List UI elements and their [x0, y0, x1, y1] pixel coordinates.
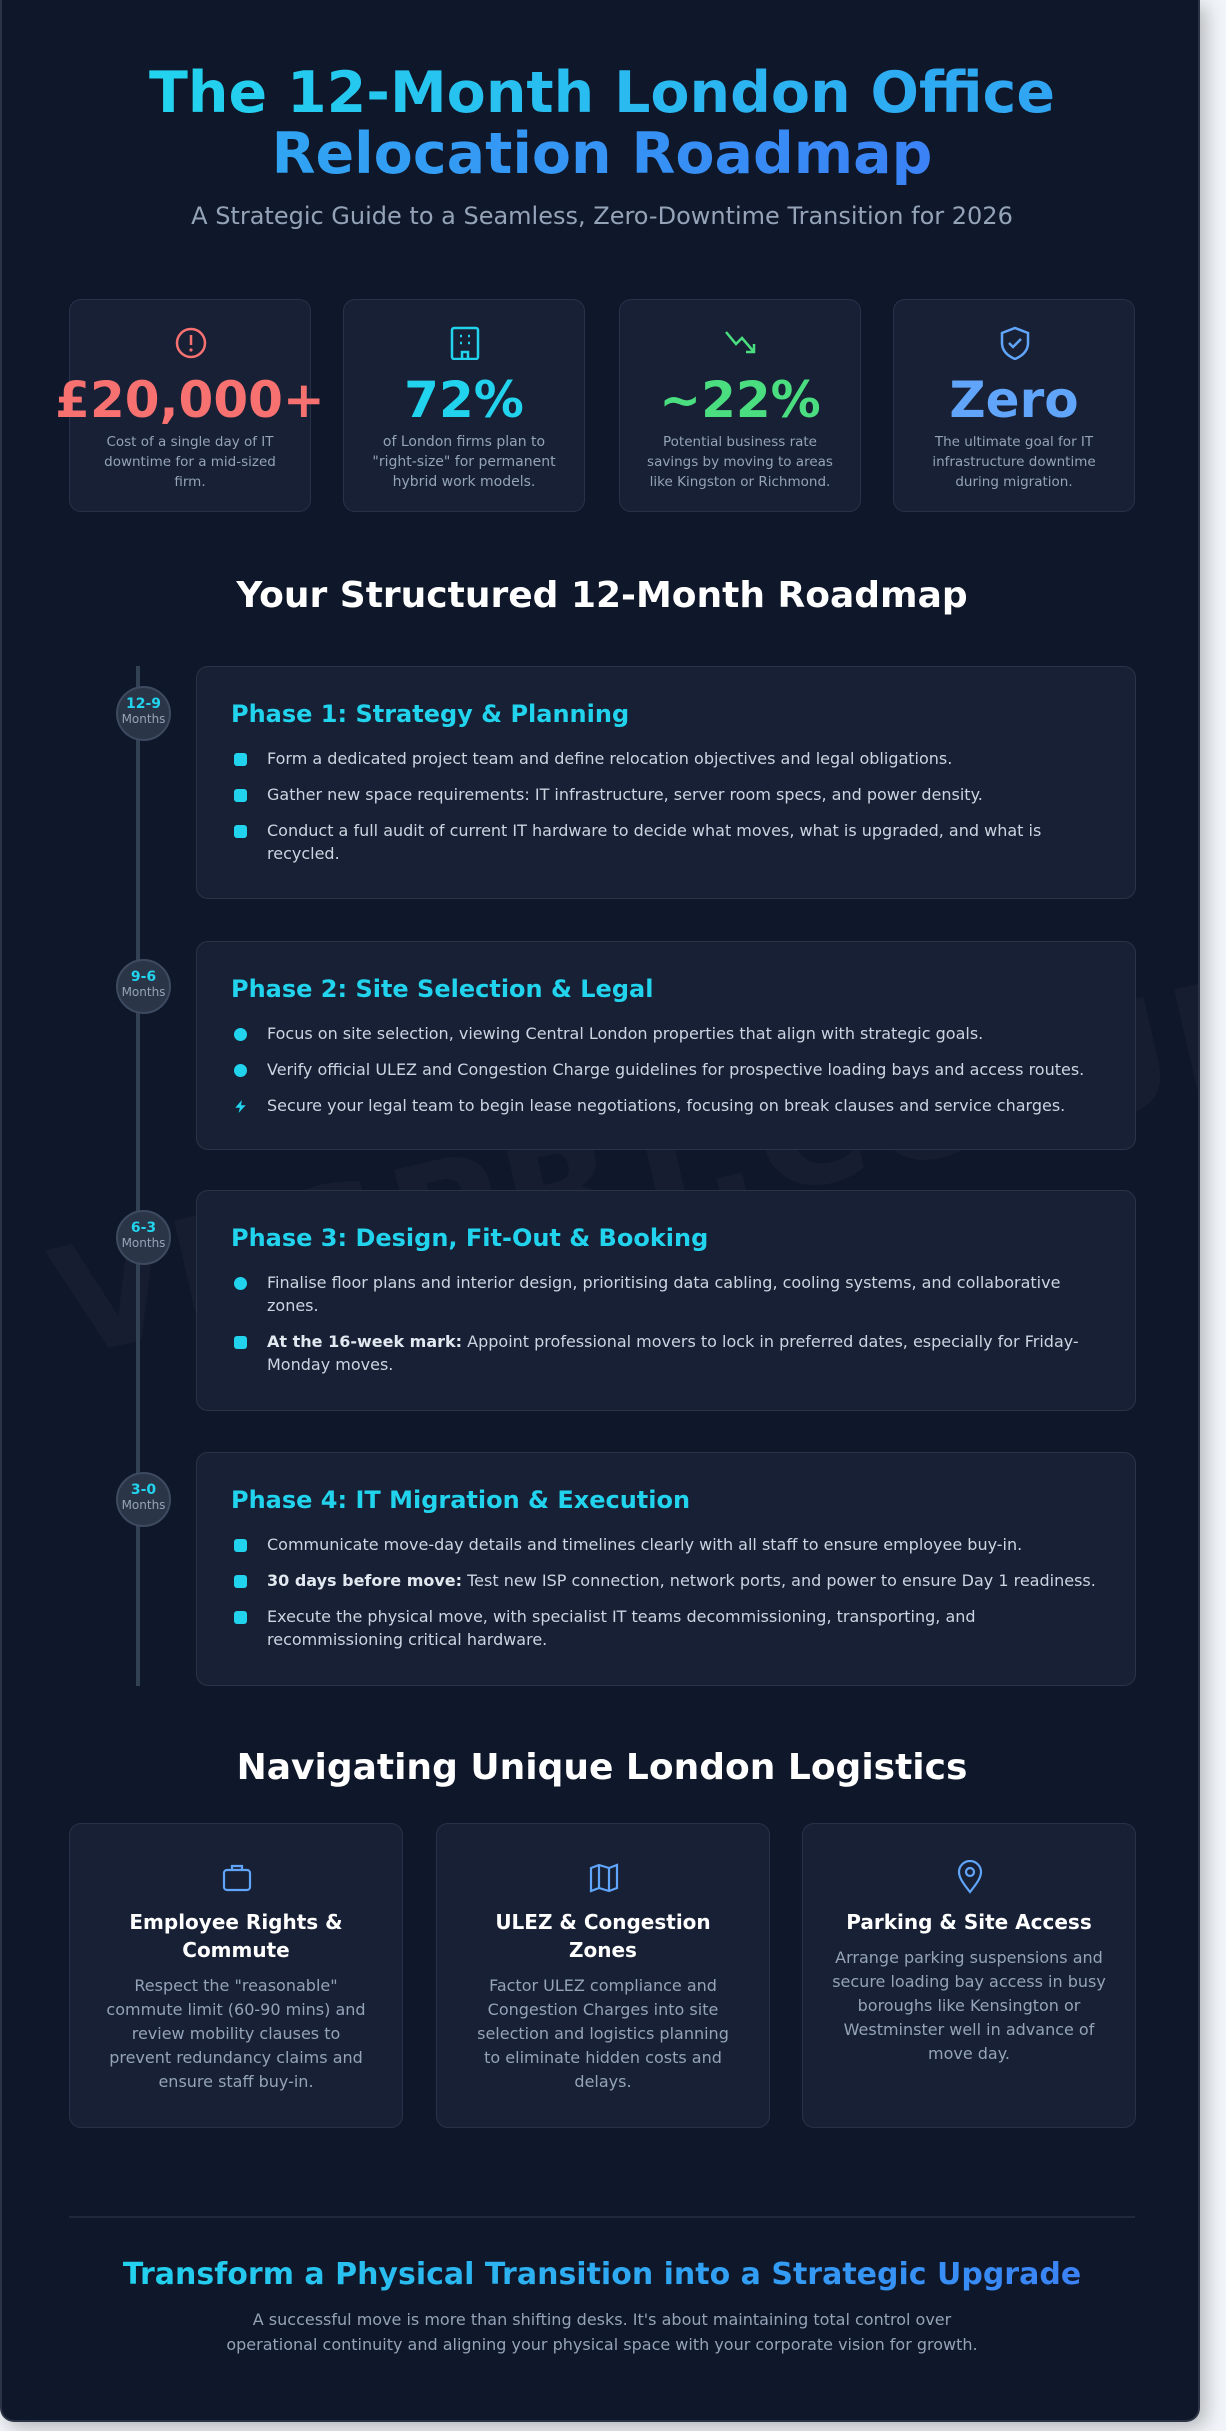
logistics card 3: Parking & Site Access — [846, 1910, 1092, 1934]
timeline dot 3 — [116, 1210, 171, 1265]
logistics card 1: Employee Rights & Commute — [129, 1910, 343, 1962]
stat card 2: 72% — [404, 371, 524, 429]
timeline dot 2: Months — [122, 985, 165, 999]
title — [149, 60, 1055, 187]
logistics card 1 — [69, 1823, 403, 2128]
logistics card 3: Arrange parking suspensions and secure loading bay access in busy boroughs like Kensington or Westminster well in advance of move day. — [832, 1948, 1106, 2063]
timeline dot 1: Months — [122, 712, 165, 726]
phase 1: Conduct a full audit of current IT hardware to decide what moves, what is upgraded, and what is recycled. — [267, 821, 1041, 863]
subtitle: A Strategic Guide to a Seamless, Zero-Downtime Transition for 2026 — [191, 202, 1013, 230]
logistics card 2: ULEZ & Congestion Zones — [495, 1910, 711, 1962]
stat card 3: ~22% — [659, 371, 821, 429]
phase 3: At the 16-week mark: Appoint professional movers to lock in preferred dates, especially for Friday-Monday moves. — [267, 1332, 1079, 1374]
stat card 1: £20,000+ — [55, 371, 325, 429]
stat card 2 — [343, 299, 585, 512]
phase 1 — [196, 666, 1136, 899]
phase 4: Execute the physical move, with specialist IT teams decommissioning, transporting, and recommissioning critical hardware. — [267, 1607, 976, 1649]
heading: roadmap: Your Structured 12-Month Roadmap — [236, 575, 968, 616]
phase 1: Gather new space requirements: IT infrastructure, server room specs, and power density. — [267, 785, 983, 804]
timeline dot 3: 6-3 — [131, 1220, 156, 1236]
icon: map — [590, 1863, 618, 1893]
divider — [69, 2216, 1135, 2218]
logistics card 1: Respect the "reasonable" commute limit (60-90 mins) and review mobility clauses to prevent redundancy claims and ensure staff buy-in. — [106, 1976, 366, 2091]
phase 2: Phase 2: Site Selection & Legal — [231, 975, 653, 1003]
phase 3: Phase 3: Design, Fit-Out & Booking — [231, 1224, 708, 1252]
stat card 1 — [69, 299, 311, 512]
timeline dot 2: 9-6 — [131, 969, 156, 985]
icon: briefcase — [222, 1864, 252, 1892]
timeline dot 1: 12-9 — [126, 696, 161, 712]
logistics card 2 — [436, 1823, 770, 2128]
phase 1: Phase 1: Strategy & Planning — [231, 700, 629, 728]
logistics card 2: Factor ULEZ compliance and Congestion Charges into site selection and logistics planning to eliminate hidden costs and delays. — [477, 1976, 729, 2091]
phase 3: Finalise floor plans and interior design, prioritising data cabling, cooling systems, and collaborative zones. — [267, 1273, 1060, 1315]
stat card 2: of London firms plan to "right-size" for permanent hybrid work models. — [372, 434, 556, 490]
icon: trend down — [725, 331, 756, 354]
phase 4: 30 days before move: Test new ISP connection, network ports, and power to ensure Day 1 readiness. — [267, 1571, 1096, 1590]
footer text: A successful move is more than shifting desks. It's about maintaining total control over operational continuity and aligning your physical space with your corporate vision for growth. — [226, 2310, 978, 2354]
icon: building — [450, 326, 480, 360]
stat card 4: The ultimate goal for IT infrastructure downtime during migration. — [932, 434, 1096, 490]
timeline dot 4 — [116, 1472, 171, 1527]
title: Relocation Roadmap — [272, 121, 932, 187]
icon: shield — [1000, 326, 1030, 360]
timeline line — [136, 666, 140, 1686]
phase 2: Verify official ULEZ and Congestion Charge guidelines for prospective loading bays and access routes. — [267, 1060, 1084, 1079]
phase 2: Focus on site selection, viewing Central London properties that align with strategic goals. — [267, 1024, 983, 1043]
timeline dot 4: Months — [122, 1498, 165, 1512]
icon: location pin — [958, 1860, 982, 1894]
timeline dot 2 — [116, 959, 171, 1014]
stat card 3 — [619, 299, 861, 512]
phase 4: Communicate move-day details and timelines clearly with all staff to ensure employee buy-in. — [267, 1535, 1022, 1554]
footer heading: Transform a Physical Transition into a Strategic Upgrade — [123, 2257, 1081, 2292]
phase 1: Form a dedicated project team and define relocation objectives and legal obligations. — [267, 749, 952, 768]
stat card 4 — [893, 299, 1135, 512]
stat card 4: Zero — [949, 371, 1079, 429]
phase 4 — [196, 1452, 1136, 1686]
phase 4: Phase 4: IT Migration & Execution — [231, 1486, 690, 1514]
logistics card 3 — [802, 1823, 1136, 2128]
icon: alert — [176, 328, 206, 358]
title: The 12-Month London Office — [149, 60, 1055, 126]
timeline dot 1 — [116, 686, 171, 741]
stat card 3: Potential business rate savings by moving to areas like Kingston or Richmond. — [647, 434, 833, 490]
phase 2: Secure your legal team to begin lease negotiations, focusing on break clauses and service charges. — [267, 1096, 1065, 1115]
timeline dot 3: Months — [122, 1236, 165, 1250]
heading: logistics: Navigating Unique London Logistics — [237, 1747, 967, 1788]
phase 2 — [196, 941, 1136, 1150]
stat card 1: Cost of a single day of IT downtime for a mid-sized firm. — [104, 434, 276, 490]
timeline dot 4: 3-0 — [131, 1482, 156, 1498]
phase 3 — [196, 1190, 1136, 1411]
